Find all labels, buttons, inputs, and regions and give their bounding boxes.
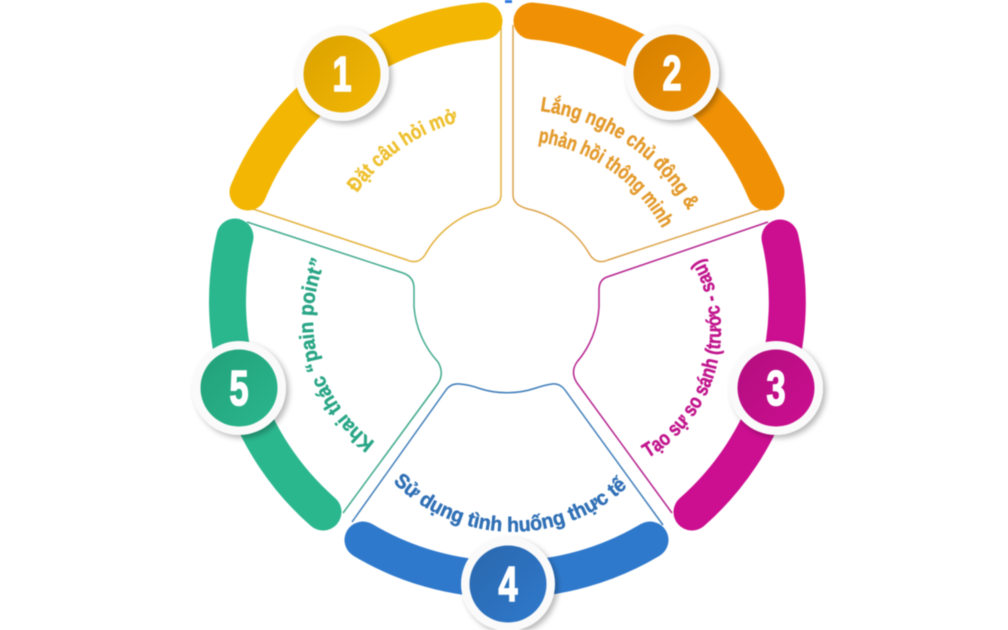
panel 5: Khai thác "pain point" <box>193 218 443 532</box>
panel 4 arc band <box>363 540 650 580</box>
small blue mark at top edge <box>505 0 512 3</box>
panel 3: Tạo sự so sánh (trước - sau) <box>572 218 829 532</box>
panel 5 number badge <box>192 341 286 435</box>
panel 2 arc band <box>532 21 766 192</box>
panel 1: Đặt câu hỏi mở <box>228 2 504 264</box>
panel 1 outline <box>250 25 501 262</box>
panel 1 number badge: 1 <box>332 47 352 101</box>
panel 2 label line 1: Lắng nghe chủ động & <box>540 94 699 211</box>
panel 2 label line 2: phản hồi thông minh <box>538 128 673 228</box>
panel 1 label: Đặt câu hỏi mở <box>346 108 457 193</box>
panel 4: Sử dụng tình huống thực tế <box>344 382 670 630</box>
panel 3 number badge <box>729 341 823 435</box>
panel 4 number badge <box>461 537 555 630</box>
panel 2 number badge <box>625 26 719 120</box>
panel 3 outline <box>574 222 768 513</box>
panel 2 number badge: 2 <box>662 46 682 100</box>
panel 4 number badge: 4 <box>498 557 518 611</box>
panel 3 label: Tạo sự so sánh (trước - sau) <box>640 258 725 457</box>
panel 2: Lắng nghe chủ động & phản hồi thông minh <box>512 2 786 264</box>
panel 4 label: Sử dụng tình huống thực tế <box>394 473 626 533</box>
panel 3 number badge: 3 <box>766 361 786 415</box>
panel 5 number badge: 5 <box>229 361 249 415</box>
panel 5 label: Khai thác “pain point” <box>298 256 375 454</box>
panel 1 arc band <box>248 21 484 192</box>
panel 5 outline <box>247 222 441 513</box>
panel 2 outline <box>513 25 763 262</box>
panel 5 arc band <box>227 237 323 512</box>
panel 3 arc band <box>692 238 787 512</box>
panel 1 number badge <box>295 27 389 121</box>
panel 4 outline <box>352 384 663 525</box>
